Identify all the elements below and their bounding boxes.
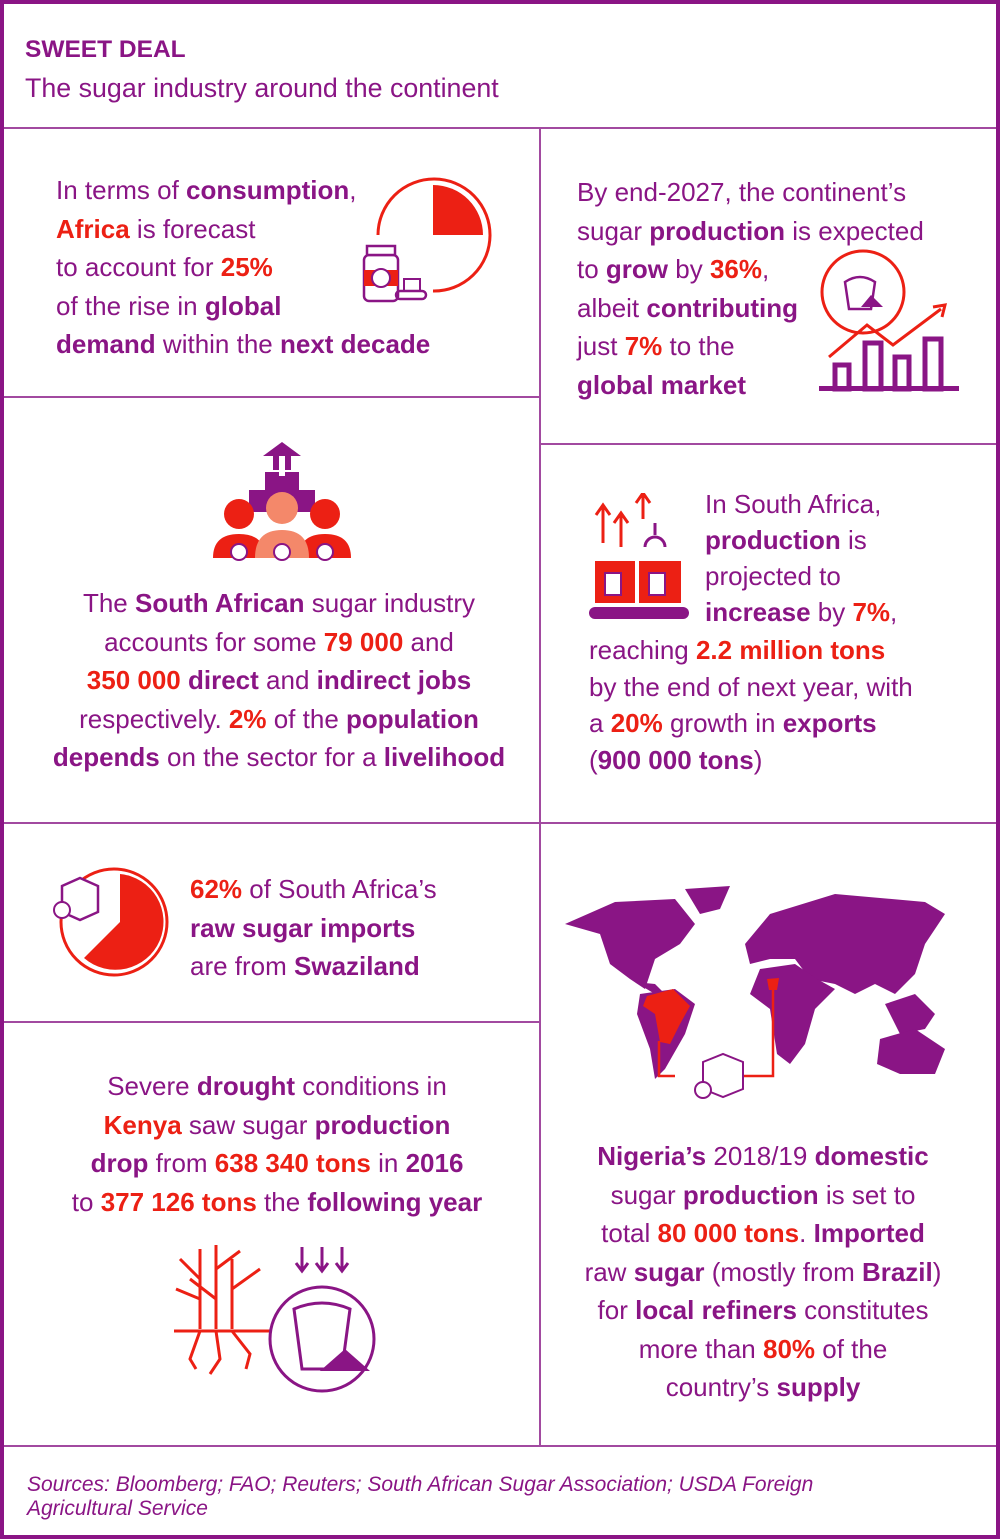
panel: consumption — [56, 175, 492, 359]
footer: sources: Sources: Bloomberg; FAO; Reuters; South African Sugar Association; USDA Foreign — [27, 1473, 813, 1496]
panel: SA production: by the end of next year, with — [589, 672, 913, 702]
icon: pie 62% with box — [53, 868, 168, 976]
text: SA production: production is — [705, 525, 867, 555]
text: Nigeria: country’s supply — [666, 1372, 860, 1402]
text: consumption: In terms of consumption, — [56, 175, 356, 205]
text: consumption: to account for 25% — [56, 252, 273, 282]
text: consumption: of the rise in global — [56, 290, 281, 320]
icon: people and building — [213, 442, 351, 561]
text: production growth: just 7% to the — [577, 331, 735, 361]
text: jobs: depends on the sector for a livelihood — [53, 742, 505, 772]
panel: Kenya drought — [72, 1071, 482, 1392]
icon: dried cane and sugar sack — [174, 1245, 376, 1392]
icon: pie with jar — [362, 178, 492, 302]
footer: sources: Agricultural Service — [27, 1497, 208, 1520]
text: jobs: respectively. 2% of the population — [79, 704, 479, 734]
panel: imports from Swaziland — [53, 868, 437, 981]
text: jobs: 350 000 direct and indirect jobs — [87, 665, 471, 695]
text: Nigeria: Nigeria’s 2018/19 domestic — [597, 1141, 929, 1171]
text: Kenya: drop from 638 340 tons in 2016 — [91, 1148, 463, 1178]
text: Nigeria: raw sugar (mostly from Brazil) — [585, 1256, 941, 1286]
icon: factory conveyor — [589, 493, 689, 619]
text: SA production — [705, 489, 897, 627]
text: Swaziland: are from Swaziland — [190, 951, 420, 981]
panel: jobs — [53, 442, 505, 772]
text: Kenya — [72, 1071, 482, 1216]
text: Nigeria: total 80 000 tons. Imported — [601, 1218, 925, 1248]
subtitle: The sugar industry around the continent — [25, 73, 499, 103]
panel: Nigeria — [565, 886, 945, 1402]
panel: production growth — [576, 177, 959, 400]
text: Nigeria — [585, 1141, 941, 1402]
footer: sources — [26, 1473, 813, 1520]
text: consumption — [56, 175, 430, 359]
text: Swaziland: 62% of South Africa’s — [190, 874, 437, 904]
text: Swaziland — [190, 874, 437, 981]
text: Kenya: to 377 126 tons the following year — [72, 1186, 482, 1216]
text: production growth: global market — [577, 370, 746, 400]
panel: SA production: a 20% growth in exports — [589, 708, 877, 738]
text: production growth: By end-2027, the continent’s — [577, 177, 906, 207]
text: Nigeria: more than 80% of the — [639, 1334, 887, 1364]
text: consumption: demand within the next decade — [56, 329, 430, 359]
text: jobs: The South African sugar industry — [83, 588, 475, 618]
text: production growth — [576, 177, 924, 400]
icon: bar chart with sugar — [819, 250, 959, 392]
text: production growth: to grow by 36%, — [577, 254, 769, 284]
text: Kenya: Kenya saw sugar production — [104, 1110, 450, 1140]
panel: SA production: reaching 2.2 million tons — [589, 635, 885, 665]
text: consumption: Africa is forecast — [56, 214, 255, 244]
panel: SA production — [589, 489, 913, 774]
title: SWEET DEAL — [25, 36, 186, 63]
text: Kenya: Severe drought conditions in — [107, 1071, 447, 1101]
text: SA production: In South Africa, — [705, 489, 881, 519]
text: Nigeria: sugar production is set to — [611, 1180, 915, 1210]
text: jobs: accounts for some 79 000 and — [104, 626, 454, 656]
panel: SA production: (900 000 tons) — [589, 744, 762, 774]
text: Nigeria: for local refiners constitutes — [598, 1295, 928, 1325]
text: SA production: increase by 7%, — [705, 597, 897, 627]
text: production growth: albeit contributing — [577, 292, 798, 322]
text: SA production: projected to — [705, 561, 841, 591]
text: jobs — [53, 588, 505, 772]
text: production growth: sugar production is expected — [577, 216, 924, 246]
map: world — [565, 886, 945, 1099]
text: Swaziland: raw sugar imports — [190, 912, 415, 942]
